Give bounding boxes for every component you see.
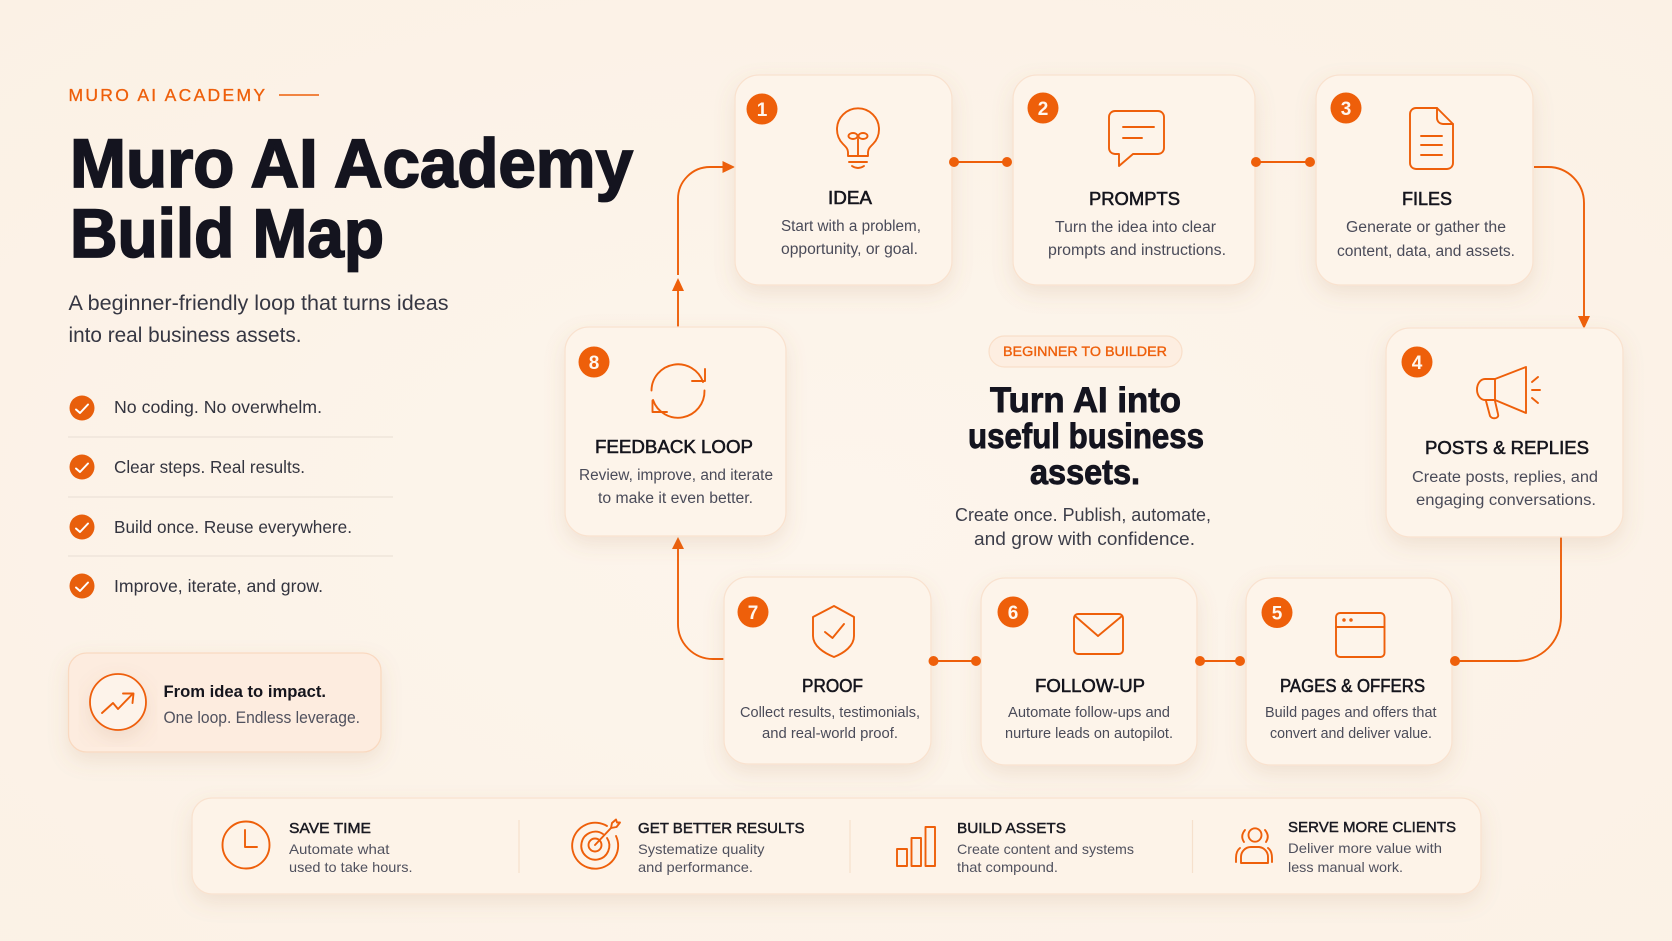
benefit: get better results: and performance. xyxy=(638,859,753,875)
card 3: files: FILES xyxy=(1402,189,1452,209)
center heading: useful business xyxy=(968,417,1204,456)
card 5: pages and offers: PAGES & OFFERS xyxy=(1280,676,1425,696)
card 4: posts and replies xyxy=(1386,328,1623,537)
benefit: serve more clients: SERVE MORE CLIENTS xyxy=(1288,819,1456,836)
card 4: posts and replies: POSTS & REPLIES xyxy=(1425,438,1589,458)
icon: bar chart xyxy=(897,827,935,866)
badge 2: 2 xyxy=(1038,99,1048,120)
checklist xyxy=(68,396,393,598)
card 7: proof: Collect results, testimonials, xyxy=(740,705,920,721)
icon: shield check xyxy=(813,606,854,657)
card 2: prompts xyxy=(1013,75,1255,285)
benefit: save time: used to take hours. xyxy=(289,859,412,875)
badge 3 xyxy=(1330,92,1362,124)
arrow: files to posts xyxy=(1534,167,1590,329)
benefit: save time: Automate what xyxy=(289,841,390,857)
badge 3: 3 xyxy=(1341,99,1351,120)
badge 2 xyxy=(1028,92,1058,124)
arrow: proof to feedback loop xyxy=(672,537,724,659)
callout: from idea to impact: From idea to impact. xyxy=(164,682,326,701)
center description xyxy=(955,505,1211,549)
icon: users xyxy=(1236,828,1272,863)
card 8: feedback loop xyxy=(565,327,786,536)
icon: document xyxy=(1410,108,1453,169)
badge 5 xyxy=(1262,597,1292,628)
icon: browser window xyxy=(1336,613,1384,657)
benefit: get better results: GET BETTER RESULTS xyxy=(638,820,804,837)
benefit: save time: SAVE TIME xyxy=(289,820,371,837)
title: Muro AI Academy xyxy=(70,125,633,202)
card 8: feedback loop: Review, improve, and iterate xyxy=(579,467,773,484)
benefit: serve more clients: Deliver more value with xyxy=(1288,840,1442,856)
card 3: files: Generate or gather the xyxy=(1346,219,1506,236)
card 1: idea: Start with a problem, xyxy=(781,218,921,235)
badge 4: 4 xyxy=(1412,353,1423,374)
center message xyxy=(955,336,1211,549)
badge 8: 8 xyxy=(589,353,599,374)
icon: target xyxy=(572,820,620,869)
check item 2 xyxy=(70,454,305,480)
badge 7: 7 xyxy=(748,603,758,624)
card 5: pages and offers xyxy=(1246,578,1452,765)
connector dot: pages outlet xyxy=(1450,656,1460,666)
icon: chat bubble xyxy=(1109,111,1164,166)
center heading xyxy=(968,381,1204,492)
card 8: feedback loop: to make it even better. xyxy=(598,490,753,507)
badge 5: 5 xyxy=(1272,604,1283,624)
connector: proof to follow-up xyxy=(928,656,981,666)
card 5: pages and offers: convert and deliver value. xyxy=(1270,726,1432,742)
badge 8 xyxy=(578,346,610,378)
badge 6 xyxy=(998,596,1028,628)
eyebrow label: MURO AI ACADEMY xyxy=(68,85,265,105)
badge 1 xyxy=(746,94,778,124)
badge 4 xyxy=(1402,346,1432,378)
icon: refresh loop xyxy=(652,364,705,418)
subtitle xyxy=(68,292,448,347)
subtitle: A beginner-friendly loop that turns ideas xyxy=(68,292,448,315)
title xyxy=(70,125,633,272)
card 3: files xyxy=(1316,75,1533,285)
benefit: get better results: Systematize quality xyxy=(638,841,764,857)
card 1: idea: IDEA xyxy=(828,188,872,208)
pill: beginner to builder: BEGINNER TO BUILDER xyxy=(1003,344,1167,359)
card 6: follow-up: FOLLOW-UP xyxy=(1035,676,1145,696)
callout: from idea to impact: One loop. Endless leverage. xyxy=(164,709,360,727)
arrow: feedback loop to idea xyxy=(672,161,735,327)
check item 4 xyxy=(70,574,323,598)
benefits bar xyxy=(192,798,1481,894)
benefit: build assets: BUILD ASSETS xyxy=(957,820,1066,837)
card 1: idea xyxy=(735,75,952,285)
subtitle: into real business assets. xyxy=(68,324,302,347)
center description: and grow with confidence. xyxy=(974,529,1195,549)
benefit: serve more clients: less manual work. xyxy=(1288,859,1403,875)
benefit: save time xyxy=(222,820,412,875)
card 6: follow-up xyxy=(981,578,1197,765)
arrow: pages to posts link xyxy=(1455,537,1561,661)
connector: prompts to files xyxy=(1251,157,1315,167)
card 2: prompts: prompts and instructions. xyxy=(1048,242,1226,259)
badge 1: 1 xyxy=(757,100,768,121)
center heading: Turn AI into xyxy=(990,381,1181,420)
title: Build Map xyxy=(70,195,384,272)
card 5: pages and offers: Build pages and offers that xyxy=(1265,705,1436,721)
icon: megaphone xyxy=(1477,367,1540,418)
card 4: posts and replies: Create posts, replies, and xyxy=(1412,469,1598,486)
card 1: idea: opportunity, or goal. xyxy=(781,241,918,258)
connector: idea to prompts xyxy=(949,157,1012,167)
check item 1: No coding. No overwhelm. xyxy=(114,397,322,417)
card 4: posts and replies: engaging conversations. xyxy=(1416,492,1596,509)
benefit: build assets xyxy=(897,820,1134,875)
badge 7 xyxy=(738,596,768,628)
check item 3: Build once. Reuse everywhere. xyxy=(114,517,352,537)
center description: Create once. Publish, automate, xyxy=(955,505,1211,525)
badge 6: 6 xyxy=(1008,603,1018,624)
benefit: build assets: Create content and systems xyxy=(957,841,1134,857)
check item 3 xyxy=(70,514,352,540)
card 6: follow-up: Automate follow-ups and xyxy=(1008,705,1170,721)
card 3: files: content, data, and assets. xyxy=(1337,243,1515,260)
pill: beginner to builder xyxy=(989,336,1182,367)
icon: clock xyxy=(222,822,270,868)
card 2: prompts: PROMPTS xyxy=(1089,189,1180,209)
card 2: prompts: Turn the idea into clear xyxy=(1055,219,1216,236)
center heading: assets. xyxy=(1030,453,1140,492)
check item 1 xyxy=(70,396,322,420)
card 7: proof xyxy=(724,577,931,764)
callout: from idea to impact xyxy=(68,653,381,752)
card 8: feedback loop: FEEDBACK LOOP xyxy=(595,437,753,457)
check item 4: Improve, iterate, and grow. xyxy=(114,576,323,596)
card 7: proof: and real-world proof. xyxy=(762,726,898,742)
connector: follow-up to pages xyxy=(1195,656,1245,666)
benefit: get better results xyxy=(572,820,804,875)
card 6: follow-up: nurture leads on autopilot. xyxy=(1005,726,1173,742)
icon: trending arrow xyxy=(90,674,146,730)
benefit: serve more clients xyxy=(1236,819,1456,875)
icon: envelope xyxy=(1074,614,1123,654)
check item 2: Clear steps. Real results. xyxy=(114,457,305,477)
benefit: build assets: that compound. xyxy=(957,859,1058,875)
icon: light bulb xyxy=(837,108,879,168)
card 7: proof: PROOF xyxy=(802,676,863,696)
